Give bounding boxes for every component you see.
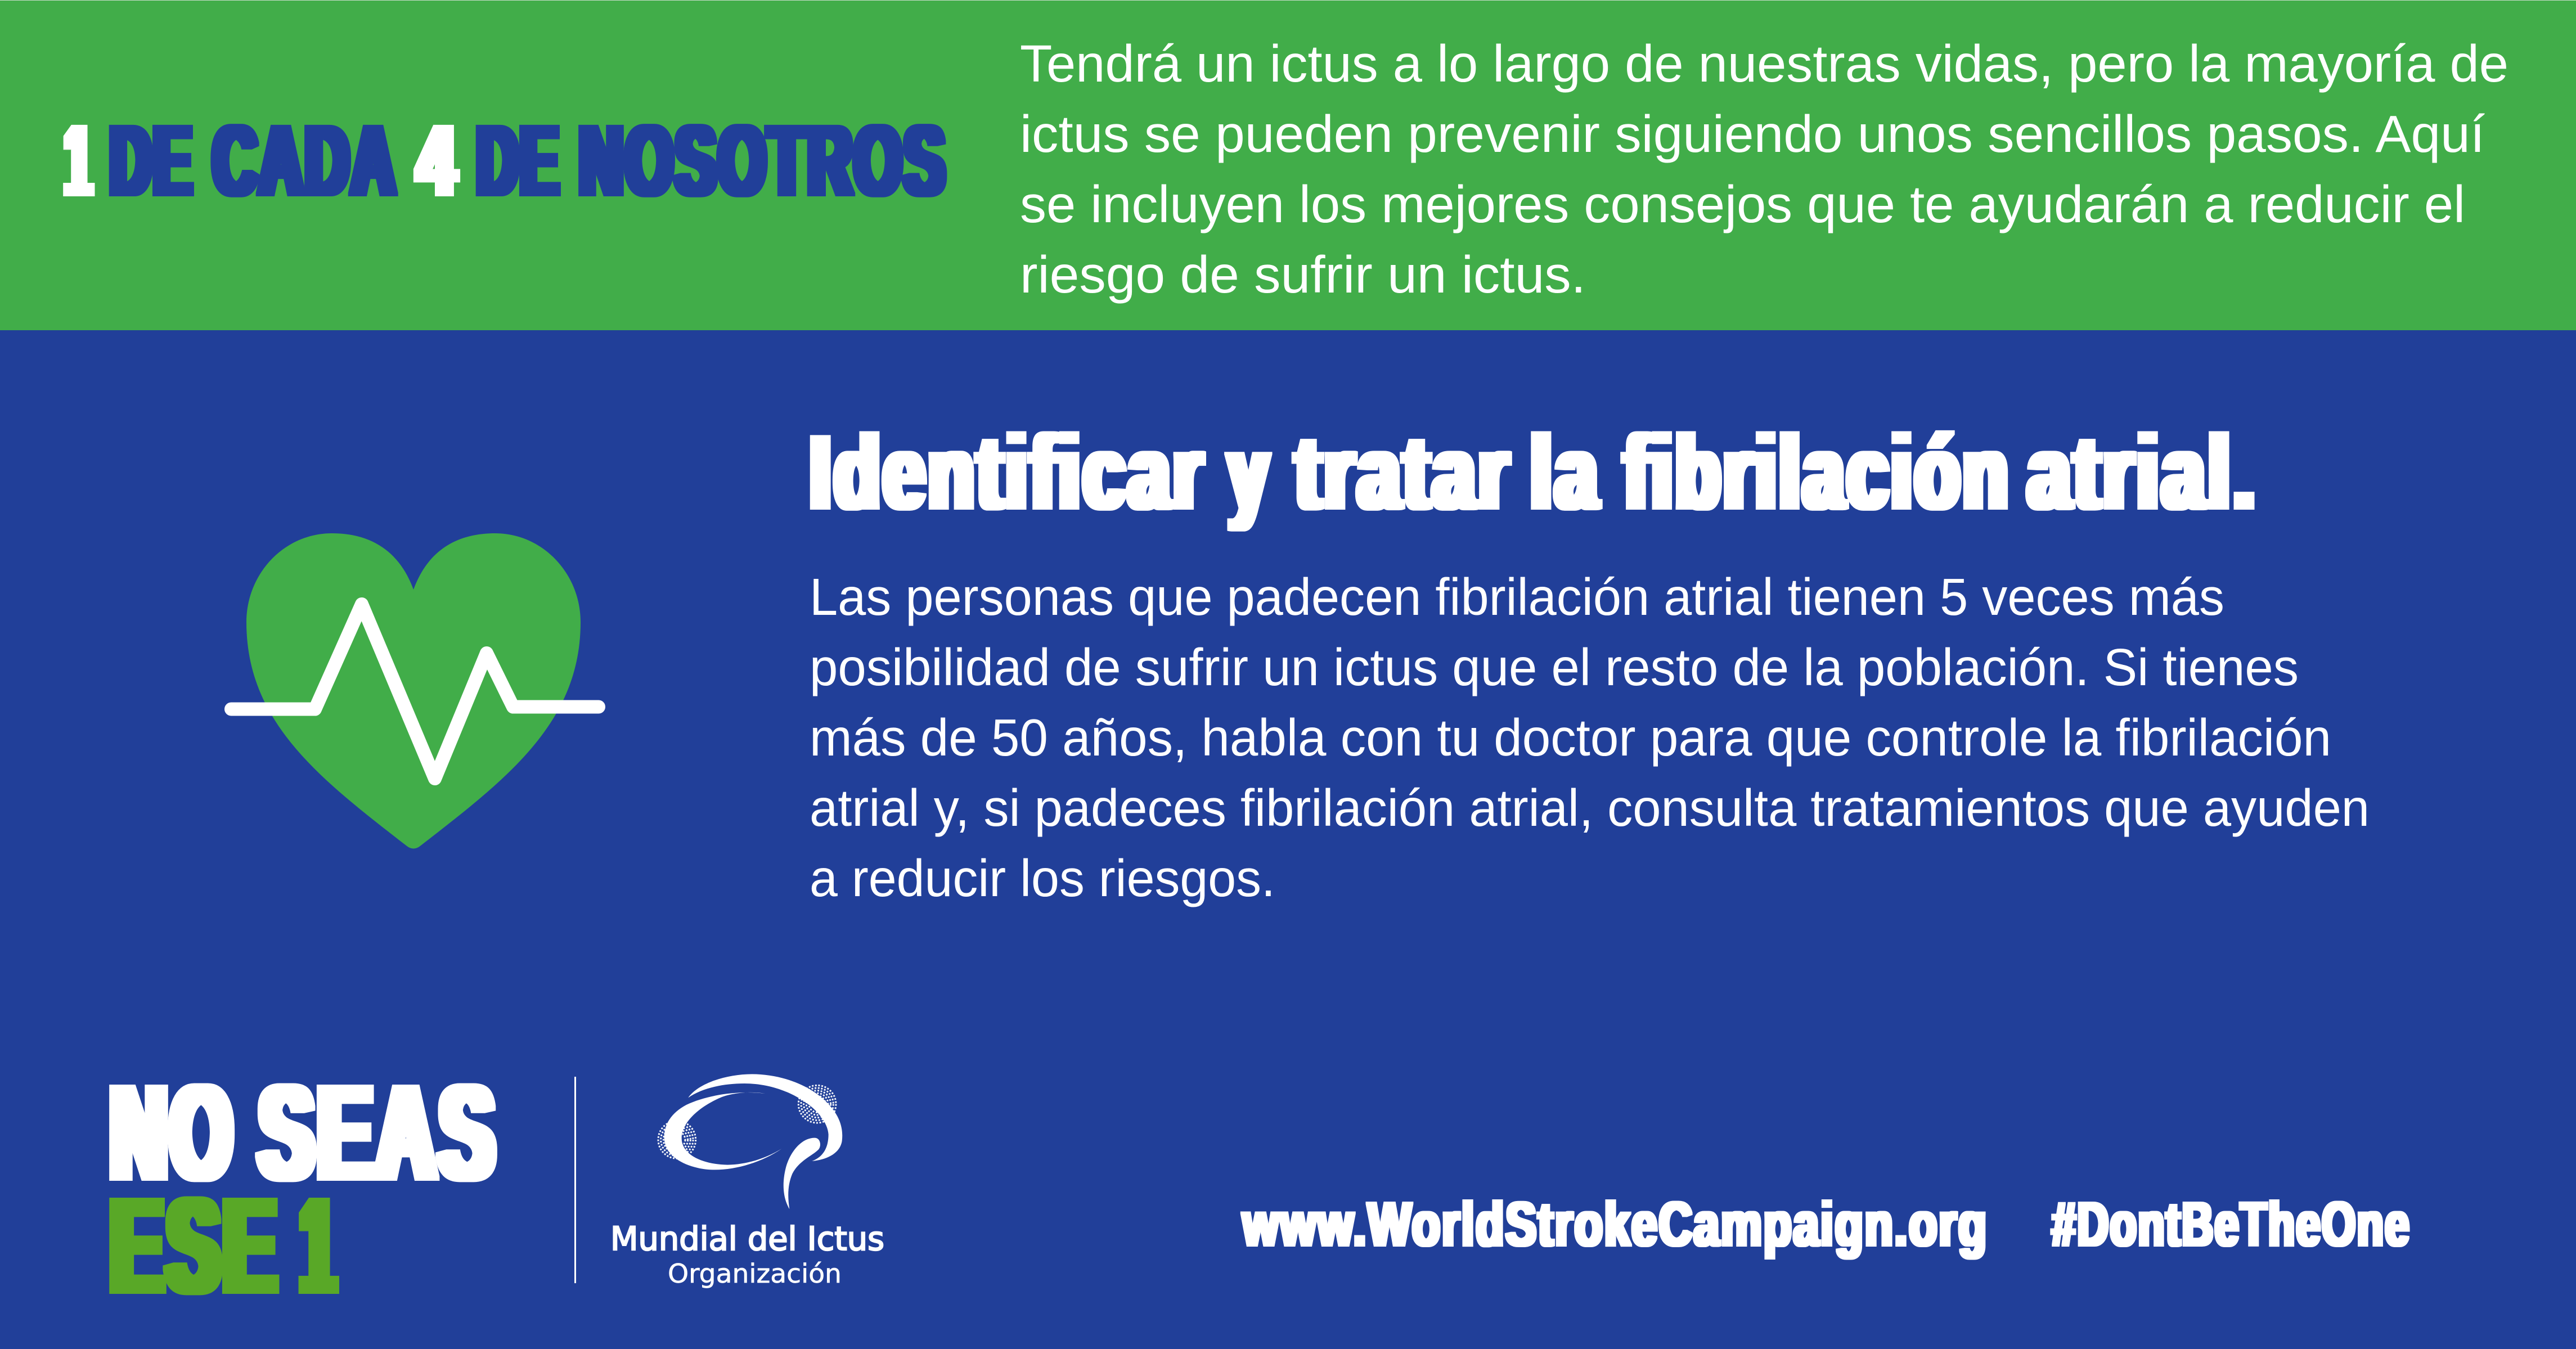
heading: 1 de cada 4 de nosotros: 4: [417, 106, 459, 216]
heading: identificar y tratar la fibrilacion atrial: tratar: [1296, 413, 1512, 531]
slogan: ese 1: ESE: [111, 1171, 280, 1320]
text: 1: [302, 1171, 338, 1320]
heading: 1 de cada 4 de nosotros: NOSOTROS: [579, 106, 947, 216]
website url: www.WorldStrokeCampaign.org: [1242, 1190, 1988, 1259]
text block: intro paragraph: Tendrá un ictus a lo largo de nuestras vidas, pero la mayoría de: [1020, 34, 2508, 93]
heading: 1 de cada 4 de nosotros: 1: [65, 106, 93, 216]
text block: body paragraph: Las personas que padecen fibrilación atrial tienen 5 veces más: [810, 568, 2224, 626]
heading: identificar y tratar la fibrilacion atrial: Identificar: [810, 413, 1206, 531]
logo: world stroke organization: [610, 1074, 884, 1289]
divider: [574, 1077, 576, 1283]
text block: intro paragraph: se incluyen los mejores consejos que te ayudarán a reducir el: [1020, 175, 2465, 233]
hashtag: #DontBeTheOne: [2052, 1190, 2411, 1259]
text block: body paragraph: atrial y, si padeces fibrilación atrial, consulta tratamientos que ayuden: [810, 779, 2370, 837]
logo wordmark: Organización: [668, 1258, 842, 1289]
slogan: no seas: [111, 1058, 498, 1207]
heading: identificar y tratar la fibrilacion atrial: [810, 413, 2259, 531]
text block: intro paragraph: riesgo de sufrir un ictus.: [1020, 245, 1586, 304]
logo wordmark: Mundial del Ictus: [610, 1220, 884, 1258]
icon: heart with pulse line: [231, 533, 599, 848]
text block: body paragraph: [810, 568, 2370, 907]
text block: intro paragraph: [1020, 34, 2508, 304]
text block: intro paragraph: ictus se pueden prevenir siguiendo unos sencillos pasos. Aquí: [1020, 105, 2485, 163]
heading: identificar y tratar la fibrilacion atrial: atrial.: [2028, 413, 2259, 531]
text block: body paragraph: posibilidad de sufrir un ictus que el resto de la población. Si tienes: [810, 638, 2299, 696]
heading: identificar y tratar la fibrilacion atrial: fibrilación: [1624, 413, 2011, 531]
slogan: no seas: SEAS: [259, 1058, 498, 1207]
heading: identificar y tratar la fibrilacion atrial: la: [1531, 413, 1601, 531]
text block: body paragraph: más de 50 años, habla con tu doctor para que controle la fibrilación: [810, 708, 2331, 767]
text block: body paragraph: a reducir los riesgos.: [810, 849, 1275, 907]
heading: identificar y tratar la fibrilacion atrial: y: [1229, 413, 1271, 531]
panel: blue background: [0, 330, 2576, 1349]
heading: 1 de cada 4 de nosotros: DE: [110, 106, 194, 216]
heading: 1 de cada 4 de nosotros: [65, 106, 947, 216]
heading: 1 de cada 4 de nosotros: DE: [477, 106, 561, 216]
logo wordmark: [610, 1220, 884, 1289]
slogan: no seas: NO: [111, 1058, 236, 1207]
panel: green top band: [0, 0, 2576, 330]
heading: 1 de cada 4 de nosotros: CADA: [213, 106, 398, 216]
